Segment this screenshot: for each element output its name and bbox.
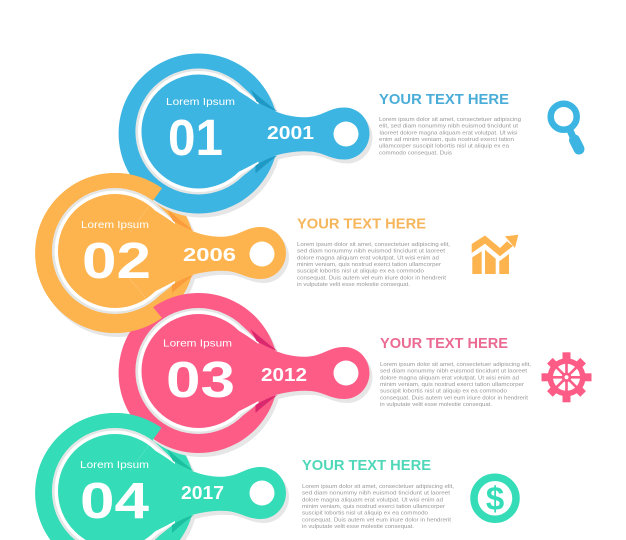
text block: step 03: sed diam nonummy nibh euismod tincidunt ut laoreet [380, 369, 527, 375]
heading: step 01: YOUR TEXT HERE [379, 91, 509, 108]
step 04 labels: 04 [80, 472, 150, 529]
text block: step 04: minim veniam, quis nostrud exerci tation ullamcorper [302, 504, 445, 510]
text block: step 03: in vulputate velit esse molestie consequat. [380, 402, 492, 408]
step 02 labels: 02 [82, 232, 151, 289]
icon: dollar coin: $ [486, 480, 504, 517]
text block: step 01: Lorem ipsum dolor sit amet, consectetuer adipiscing [379, 117, 521, 123]
icon: ship wheel gear [542, 352, 592, 402]
step 01 labels: 2001 [267, 123, 314, 143]
text block: step 04: Lorem ipsum dolor sit amet, consectetuer adipiscing elit, [302, 484, 454, 490]
text block: step 01: commodo consequat. Duis [379, 150, 452, 156]
panel: step 02 orange shape [35, 173, 289, 337]
icon: growth chart [472, 235, 518, 274]
step 03 labels: Lorem Ipsum [163, 338, 232, 350]
step 02 labels: Lorem Ipsum [81, 219, 149, 231]
step 04 labels: 2017 [181, 483, 224, 503]
overlap: orange over pink [36, 267, 162, 333]
text block: step 02: sed diam nonummy nibh euismod tincidunt ut laoreet [297, 249, 446, 255]
text block: step 03: dolore magna aliquam erat volutpat. Ut wisi enim ad [380, 375, 519, 381]
text block: step 03: Lorem ipsum dolor sit amet, consectetuer adipiscing elit, [380, 362, 531, 368]
text block: step 01: enim ad minim veniam, quis nostrud exerci tation [379, 137, 514, 143]
overlap: orange over blue [38, 173, 162, 232]
step 03 labels: 03 [166, 351, 235, 408]
overlap: green over pink [38, 413, 162, 471]
text block: step 03 [380, 362, 531, 408]
heading: step 03: YOUR TEXT HERE [380, 335, 508, 352]
text block: step 02: consequat. Duis autem vel eum iriure dolor in hendrerit [297, 275, 446, 281]
step 02 labels: 2006 [183, 245, 236, 265]
step 04 labels: Lorem Ipsum [80, 459, 149, 471]
text block: step 04: dolore magna aliquam erat volutpat. Ut wisi enim ad [302, 497, 443, 503]
text block: step 03: minim veniam, quis nostrud exerci tation ullamcorper [380, 382, 524, 388]
text block: step 04: in vulputate velit esse molestie consequat. [302, 524, 414, 530]
panel: step 03 pink shape [119, 293, 372, 457]
icon: magnifying glass [551, 104, 579, 149]
step 03 labels: 2012 [261, 365, 307, 385]
text block: step 02: Lorem ipsum dolor sit amet, consectetuer adipiscing elit, [297, 242, 450, 248]
text block: step 04: sed diam nonummy nibh euismod tincidunt ut laoreet [302, 491, 451, 497]
text block: step 02: in vulputate velit esse molestie consequat. [297, 282, 410, 288]
text block: step 02 [297, 242, 450, 288]
text block: step 01: laoreet dolore magna aliquam erat volutpat. Ut wisi [380, 130, 518, 136]
step 01 labels [166, 96, 314, 166]
heading: step 04: YOUR TEXT HERE [302, 457, 431, 474]
icon: dollar coin [474, 477, 516, 519]
step 03 labels [163, 338, 307, 408]
text block: step 04: suscipit lobortis nisl ut aliquip ex ea commodo [302, 511, 428, 517]
text block: step 01: elit, sed diam nonummy nibh euismod tincidunt ut [379, 124, 518, 130]
text block: step 02: minim veniam, quis nostrud exerci tation ullamcorper [297, 262, 441, 268]
text block: step 02: suscipit lobortis nisl ut aliquip ex ea commodo [297, 269, 424, 275]
step 02 labels [81, 219, 236, 289]
step 01 labels: 01 [168, 109, 223, 166]
text block: step 03: suscipit lobortis nisl ut aliquip ex ea commodo [380, 389, 507, 395]
step 01 labels: Lorem Ipsum [166, 96, 235, 108]
text block: step 02: dolore magna aliquam erat volutpat. Ut wisi enim ad [297, 255, 439, 261]
step 04 labels [80, 459, 224, 529]
text block: step 04 [302, 484, 454, 530]
panel: step 01 blue shape [119, 54, 372, 218]
text block: step 01: ullamcorper suscipit lobortis nisl ut aliquip ex ea [379, 144, 510, 150]
heading: step 02: YOUR TEXT HERE [297, 216, 426, 232]
panel: step 04 green shape [35, 413, 289, 540]
text block: step 01 [379, 117, 521, 156]
text block: step 04: consequat. Duis autem vel eum iriure dolor in hendrerit [302, 517, 451, 523]
text block: step 03: consequat. Duis autem vel eum iriure dolor in hendrerit [380, 395, 528, 401]
